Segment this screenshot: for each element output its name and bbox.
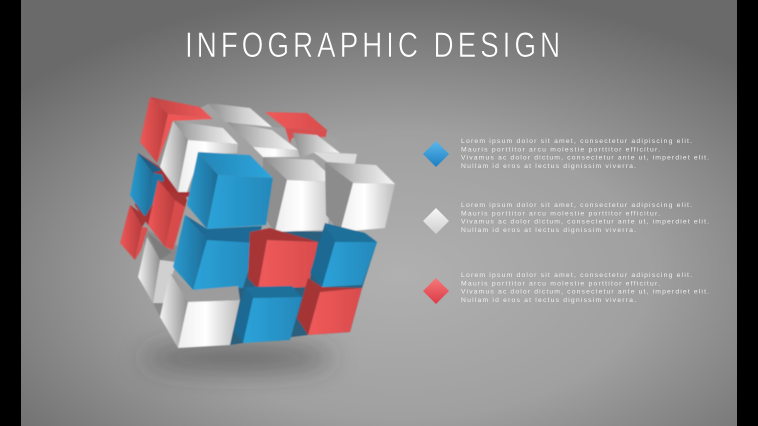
text block 3: Lorem ipsum dolor sit amet, consectetur adipiscing elit. [461, 272, 692, 279]
legend item: red [423, 272, 709, 304]
text block 2: Nullam id eros at lectus dignissim viverra. [461, 227, 636, 234]
text block 3: Mauris porttitor arcu molestie porttitor efficitur. [461, 280, 660, 288]
backing fills between cubes [135, 104, 395, 345]
icon: blue diamond [423, 141, 449, 167]
3D cube [120, 97, 395, 348]
left side cubes [120, 153, 187, 303]
icon: white diamond [423, 208, 449, 234]
blue cube middle left [173, 215, 262, 290]
text block 1: Nullam id eros at lectus dignissim viverra. [461, 163, 636, 170]
text block 1: Lorem ipsum dolor sit amet, consectetur adipiscing elit. [461, 138, 692, 145]
text block 3 [461, 272, 709, 304]
title: INFOGRAPHIC DESIGN [185, 25, 560, 65]
text block 2: Vivamus ac dolor dictum, consectetur ante ut, imperdiet elit. [461, 218, 709, 226]
text block 1: Mauris porttitor arcu molestie porttitor efficitur. [461, 146, 660, 154]
legend item: blue [423, 138, 709, 170]
blue cube centre right [310, 223, 377, 287]
text block 3: Nullam id eros at lectus dignissim viverra. [461, 297, 636, 304]
blue cube top front [187, 152, 273, 229]
text block 2: Lorem ipsum dolor sit amet, consectetur adipiscing elit. [461, 202, 692, 209]
legend item: white [423, 202, 709, 234]
red cube lower right [297, 278, 362, 335]
white cube upper left [160, 121, 238, 199]
red cube centre [248, 228, 318, 289]
white cubes top front row [262, 157, 395, 232]
icon: red diamond [423, 278, 449, 304]
text block 2 [461, 202, 709, 234]
text block 2: Mauris porttitor arcu molestie porttitor efficitur. [461, 210, 660, 218]
blue cube bottom centre [233, 286, 302, 343]
cube shadow [143, 344, 333, 372]
white cube bottom left [160, 273, 240, 348]
text block 3: Vivamus ac dolor dictum, consectetur ante ut, imperdiet elit. [461, 288, 709, 296]
text block 1: Vivamus ac dolor dictum, consectetur ante ut, imperdiet elit. [461, 154, 709, 162]
back cubes: top row [140, 97, 357, 182]
text block 1 [461, 138, 709, 170]
